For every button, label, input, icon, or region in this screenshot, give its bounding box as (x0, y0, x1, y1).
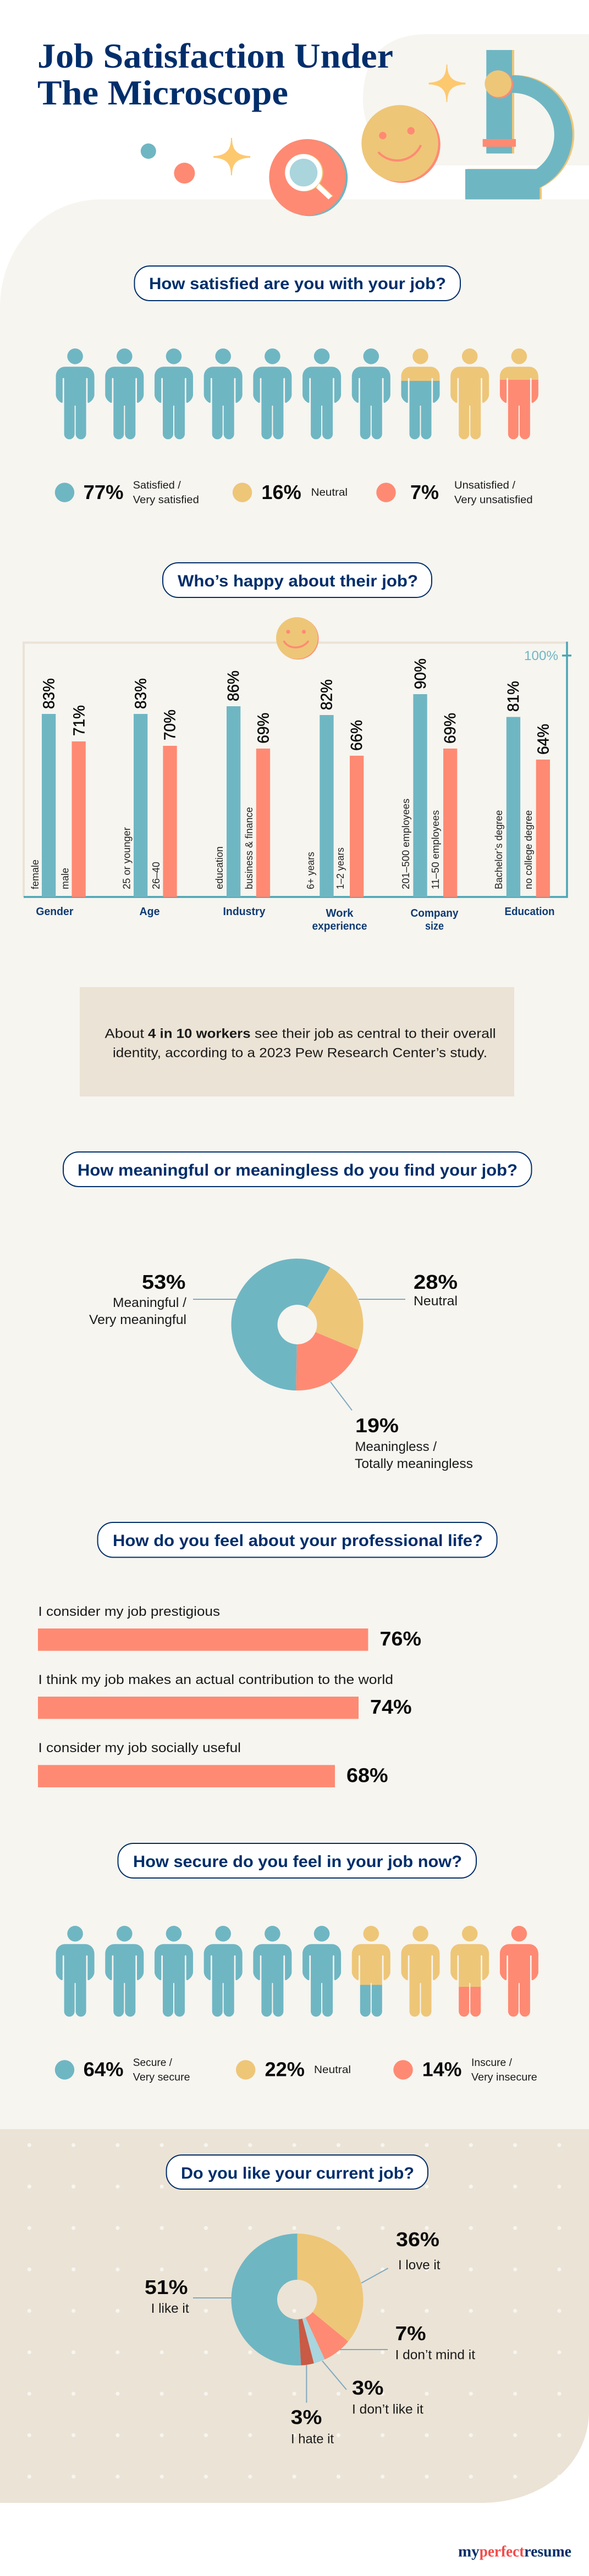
bar labels: male (59, 868, 70, 889)
legend: satisfaction: Unsatisfied / (454, 480, 516, 491)
bar labels: no college degree (523, 810, 534, 889)
panel: do you like your job background (0, 2129, 589, 2503)
label: 19% meaningless: Meaningless / (355, 1439, 437, 1454)
legend: satisfaction: Very satisfied (133, 495, 199, 506)
legend: satisfaction: 16% (261, 481, 301, 503)
label: 19% meaningless (331, 1382, 473, 1471)
heading: who's happy (163, 563, 432, 597)
label: 28% neutral (359, 1271, 458, 1309)
label: 7% don't mind (340, 2322, 475, 2362)
legend: security (55, 2057, 537, 2084)
bar values: 83% (132, 678, 150, 709)
legend: satisfaction: Very unsatisfied (454, 495, 533, 506)
bar: socially useful (38, 1741, 388, 1787)
slice: neutral 28% (307, 1267, 363, 1350)
legend: security: 14% (422, 2058, 462, 2081)
heading: how satisfied: How satisfied are you with your job? (149, 275, 446, 293)
bar labels: education (214, 846, 225, 889)
label: 36% love: I love it (398, 2258, 441, 2273)
slice: I like it 51% (231, 2234, 301, 2366)
legend: satisfaction: Satisfied / (133, 480, 181, 491)
bar values: 66% (348, 720, 366, 751)
bar labels: 1–2 years (335, 847, 346, 889)
legend: satisfaction: Neutral (311, 487, 348, 498)
pictogram: satisfaction people (56, 348, 538, 439)
bar labels: 6+ years (305, 852, 316, 889)
icon: small smiley (276, 617, 319, 660)
title (37, 36, 393, 112)
bar: socially useful: 68% (346, 1764, 388, 1786)
legend: satisfaction: 7% (410, 481, 439, 503)
legend: satisfaction (55, 480, 533, 506)
icon: sparkle left (213, 138, 250, 175)
bar values (41, 658, 552, 755)
label: 28% neutral: Neutral (414, 1294, 458, 1309)
label: 19% meaningless: 19% (355, 1414, 399, 1437)
label: 51% like: 51% (145, 2276, 188, 2298)
bar labels: Bachelor’s degree (493, 810, 504, 889)
label: 3% hate: I hate it (291, 2431, 334, 2447)
bar values: 82% (318, 679, 335, 710)
legend: security: Very secure (133, 2072, 190, 2084)
bar labels: 26–40 (151, 862, 162, 889)
heading: how satisfied (134, 266, 460, 301)
label: 51% like (145, 2276, 232, 2316)
label: 3% hate: 3% (291, 2406, 322, 2429)
heading: like current job: Do you like your current job? (181, 2164, 414, 2182)
bar: prestigious (38, 1604, 421, 1651)
heading: like current job (167, 2155, 428, 2189)
bar values: 90% (412, 658, 430, 689)
label: 3% don't like: I don’t like it (352, 2402, 423, 2417)
slice: I don't like it 3% (302, 2318, 325, 2363)
callout: 4 in 10 workers: About (104, 1027, 144, 1041)
bar labels: business & finance (244, 807, 255, 889)
header background shape (363, 34, 589, 165)
label: 3% don't like: 3% (352, 2376, 383, 2399)
bar labels: female (30, 860, 41, 889)
logo: myperfectresume (458, 2544, 571, 2561)
title: Job Satisfaction Under (37, 36, 393, 75)
slice: I hate it 3% (299, 2319, 314, 2366)
pictogram: security people (56, 1926, 538, 2017)
donut chart: like current job (231, 2234, 363, 2366)
callout: 4 in 10 workers: see their job as central to their overall (255, 1027, 496, 1041)
bar labels: 25 or younger (121, 827, 132, 889)
bar: socially useful: I consider my job socially useful (38, 1741, 241, 1755)
bar: prestigious: I consider my job prestigious (38, 1604, 220, 1619)
bar values: 69% (255, 713, 273, 744)
label: 3% hate (291, 2365, 334, 2447)
legend: satisfaction: 77% (84, 481, 124, 503)
legend: security: 64% (84, 2058, 124, 2081)
chart categories: Work (326, 907, 354, 919)
chart categories: size (425, 920, 444, 932)
chart categories: experience (312, 920, 367, 932)
bar: contribution: 74% (370, 1696, 412, 1718)
bar chart: who's happy: 100% (524, 649, 558, 663)
bar values: 70% (162, 710, 179, 740)
bar: contribution: I think my job makes an actual contribution to the world (38, 1672, 393, 1687)
chart categories: Company (410, 907, 459, 919)
legend: security: Very insecure (471, 2072, 537, 2084)
bars (42, 694, 550, 897)
icon: red dot (174, 163, 195, 184)
bar values: 69% (442, 713, 459, 744)
label: 53% meaningful: Meaningful / (113, 1295, 186, 1310)
bar labels: 201–500 employees (400, 799, 411, 889)
chart categories: Gender (36, 906, 74, 918)
logo: myperfectresume: perfect (480, 2544, 525, 2561)
callout: 4 in 10 workers: identity, according to a 2023 Pew Research Center’s study. (113, 1046, 487, 1061)
logo: myperfectresume: resume (524, 2544, 571, 2561)
donut chart: meaningful (231, 1259, 363, 1391)
icon: smiley face (361, 105, 441, 183)
chart categories (36, 906, 554, 932)
label: 53% meaningful: Very meaningful (89, 1312, 186, 1327)
label: 19% meaningless: Totally meaningless (355, 1456, 473, 1471)
label: 7% don't mind: 7% (395, 2322, 426, 2345)
label: 28% neutral: 28% (414, 1271, 458, 1293)
slice: I don't mind it 7% (306, 2312, 348, 2359)
heading: how meaningful: How meaningful or meaningless do you find your job? (78, 1161, 518, 1179)
bar: prestigious: 76% (379, 1627, 421, 1650)
heading: how meaningful (63, 1152, 531, 1187)
icon: magnifier disc (269, 139, 348, 216)
slice: I love it 36% (297, 2234, 363, 2341)
heading: how secure: How secure do you feel in your job now? (133, 1853, 462, 1871)
label: 36% love (361, 2228, 441, 2283)
chart categories: Education (505, 906, 554, 918)
slice: meaningless 19% (296, 1332, 358, 1391)
callout: 4 in 10 workers (80, 987, 514, 1096)
callout: 4 in 10 workers: 4 in 10 workers (148, 1027, 251, 1041)
main panel background (0, 200, 589, 2132)
slice: meaningful 53% (231, 1259, 330, 1391)
bar labels: 11–50 employees (430, 810, 441, 889)
label: 51% like: I like it (151, 2301, 189, 2316)
bar values: 81% (505, 681, 522, 712)
legend: security: Inscure / (471, 2057, 513, 2069)
label: 36% love: 36% (396, 2228, 439, 2251)
label: 53% meaningful (89, 1271, 236, 1327)
chart categories: Age (140, 906, 159, 918)
heading: professional life (98, 1522, 497, 1558)
bar values: 86% (225, 671, 243, 701)
icon: sparkle right (429, 65, 465, 102)
heading: who's happy: Who’s happy about their job? (178, 572, 418, 590)
bar labels (30, 799, 534, 889)
legend: security: Secure / (133, 2057, 173, 2069)
bar values: 83% (41, 678, 58, 709)
label: 7% don't mind: I don’t mind it (395, 2348, 475, 2362)
legend: security: Neutral (314, 2064, 351, 2076)
bar values: 71% (70, 705, 88, 736)
title: The Microscope (37, 73, 288, 112)
legend: security: 22% (265, 2058, 305, 2081)
label: 53% meaningful: 53% (142, 1271, 186, 1293)
logo: myperfectresume: my (458, 2544, 480, 2561)
bar chart: who's happy (24, 617, 571, 932)
chart categories: Industry (223, 906, 266, 918)
bar values: 64% (535, 724, 552, 755)
bar: contribution (38, 1672, 412, 1719)
heading: how secure (118, 1843, 476, 1878)
heading: professional life: How do you feel about your professional life? (113, 1532, 483, 1550)
label: 3% don't like (322, 2361, 423, 2417)
icon: microscope (465, 50, 574, 200)
icon: teal dot (141, 143, 156, 159)
